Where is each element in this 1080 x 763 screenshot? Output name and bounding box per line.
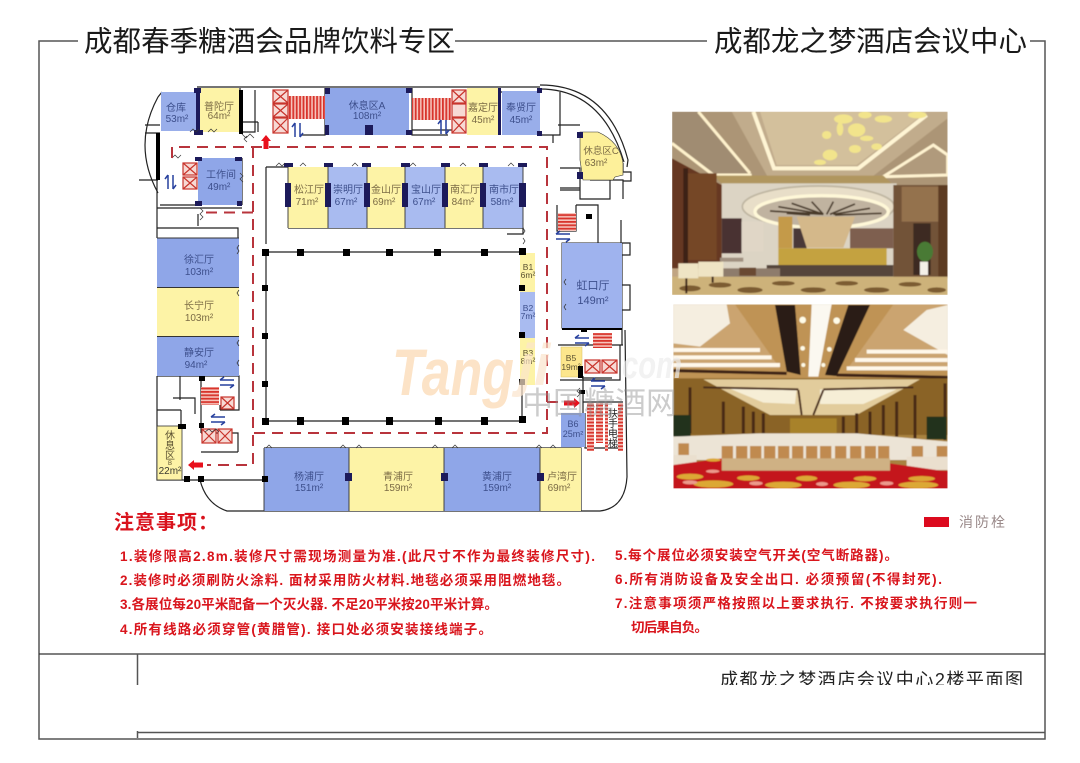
photo: hotel lobby — [672, 112, 948, 295]
room: 金山厅: 金山厅 — [371, 183, 401, 196]
room: 嘉定厅: 嘉定厅 — [468, 101, 498, 114]
booth: B3: 8m² — [521, 356, 535, 366]
note 6: 6.所有消防设备及安全出口. 必须预留(不得封死). — [615, 571, 942, 587]
watermark — [392, 333, 682, 421]
room: 黄浦厅: 159m² — [483, 483, 512, 494]
room: 宝山厅 — [405, 167, 445, 228]
note 7 continued: 切后果自负。 — [631, 619, 708, 635]
room: 崇明厅 — [328, 167, 367, 228]
room: 仓库 — [161, 92, 198, 131]
icons: blue exit arrows — [165, 120, 605, 425]
room: 休息区B: 息 — [165, 439, 175, 452]
room: 休息区C: 63m² — [585, 158, 608, 169]
room: 奉贤厅 — [502, 91, 540, 135]
room: 仓库: 53m² — [166, 114, 189, 125]
room: 静安厅 — [157, 337, 239, 376]
room: 徐汇厅: 徐汇厅 — [184, 253, 214, 266]
room: 宝山厅: 67m² — [413, 197, 436, 208]
room: 南市厅 — [483, 167, 523, 228]
icon: escalator: 梯 — [608, 437, 618, 450]
room: 普陀厅 — [198, 88, 239, 132]
note 5: 5.每个展位必须安装空气开关(空气断路器)。 — [615, 547, 898, 563]
floor plan — [139, 85, 631, 511]
room: 奉贤厅: 奉贤厅 — [506, 101, 536, 114]
room: 工作间: 49m² — [208, 182, 231, 193]
room: 南汇厅 — [445, 167, 483, 228]
room: 松江厅: 71m² — [296, 197, 319, 208]
room: 崇明厅: 崇明厅 — [333, 184, 363, 196]
room: 青浦厅 — [349, 448, 444, 511]
watermark: ji — [511, 333, 552, 398]
room: 休息区C: 休息区C — [583, 145, 619, 157]
room: 松江厅: 松江厅 — [294, 183, 324, 196]
booth: B5: 19m² — [561, 362, 581, 372]
title: hotel name: 成都龙之梦酒店会议中心 — [714, 26, 1027, 58]
room: 长宁厅 — [157, 288, 239, 336]
elevators — [183, 90, 617, 443]
icon: red exit arrow right — [564, 398, 580, 408]
room: 青浦厅: 青浦厅 — [383, 470, 413, 483]
room: 休息区B: 22m² — [159, 466, 182, 477]
room: 徐汇厅 — [157, 238, 239, 287]
room: 长宁厅: 103m² — [185, 313, 214, 324]
room: 休息区C — [580, 132, 623, 180]
room: 休息区B: 休 — [165, 430, 175, 442]
room: 杨浦厅: 杨浦厅 — [294, 470, 324, 483]
booth: B2: 7m² — [521, 311, 535, 321]
room: 南市厅: 58m² — [491, 197, 514, 208]
room: 黄浦厅: 黄浦厅 — [482, 470, 512, 483]
room dividers — [157, 167, 540, 511]
room: 杨浦厅: 151m² — [295, 483, 324, 494]
room: 工作间: 工作间 — [206, 168, 236, 181]
note 3: 3.各展位每20平米配备一个灭火器. 不足20平米按20平米计算。 — [120, 596, 498, 612]
room: 休息区B: B — [168, 461, 172, 467]
note 1: 1.装修限高2.8m.装修尺寸需现场测量为准.(此尺寸不作为最终装修尺寸). — [120, 548, 595, 564]
floor plan caption: 成都龙之梦酒店会议中心2楼平面图 — [720, 670, 1023, 690]
icon: red exit arrow left — [188, 460, 203, 470]
booth: B2 — [520, 292, 535, 338]
booth: B5 — [561, 347, 582, 377]
room: 休息区B — [157, 426, 182, 480]
door symbols — [172, 129, 580, 448]
icon: red exit arrow up — [261, 135, 271, 149]
room: 休息区A: 108m² — [353, 111, 382, 122]
watermark: Tang — [392, 335, 514, 409]
room: 普陀厅: 普陀厅 — [204, 100, 234, 113]
booth: B3 — [520, 338, 535, 385]
legend: fire hydrant: 消防栓 — [959, 514, 1005, 530]
room: 青浦厅: 159m² — [384, 483, 413, 494]
columns — [156, 90, 622, 482]
room: 崇明厅: 67m² — [335, 197, 358, 208]
booth: B2: B2 — [523, 303, 533, 313]
fire route dashed line — [172, 147, 560, 465]
title: expo zone: 成都春季糖酒会品牌饮料专区 — [84, 26, 455, 58]
notes column 1 — [120, 548, 595, 637]
room: 徐汇厅: 103m² — [185, 267, 214, 278]
room: 虹口厅: 149m² — [577, 295, 609, 307]
room: 金山厅: 69m² — [373, 197, 396, 208]
room: 南汇厅: 84m² — [452, 197, 475, 208]
icon: escalator: 电 — [608, 427, 618, 440]
room: 黄浦厅 — [444, 448, 540, 511]
room: 卢湾厅: 卢湾厅 — [547, 470, 577, 483]
room: 金山厅 — [367, 167, 405, 228]
wall pillars navy — [194, 88, 583, 481]
room: 静安厅: 94m² — [185, 360, 208, 371]
room: 奉贤厅: 45m² — [510, 115, 533, 126]
note 4: 4.所有线路必须穿管(黄腊管). 接口处必须安装接线端子。 — [120, 621, 492, 637]
room: 休息区A: 休息区A — [349, 99, 386, 112]
room: 普陀厅: 64m² — [208, 111, 231, 122]
booth: B6 — [561, 413, 585, 447]
note 2: 2.装修时必须刷防火涂料. 面材采用防火材料.地毯必须采用阻燃地毯。 — [120, 572, 570, 588]
room: 虹口厅: 虹口厅 — [576, 279, 610, 292]
building walls — [139, 85, 631, 511]
room: 卢湾厅 — [540, 448, 581, 511]
legend: fire hydrant — [924, 514, 1005, 530]
notes column 2 — [615, 547, 978, 635]
room: 嘉定厅: 45m² — [472, 115, 495, 126]
stairs — [201, 96, 612, 405]
room: 静安厅: 静安厅 — [184, 346, 214, 359]
booth: B1: B1 — [523, 262, 533, 272]
booth: B1 — [520, 253, 535, 292]
note 7: 7.注意事项须严格按照以上要求执行. 不按要求执行则一 — [615, 595, 978, 611]
room: 松江厅 — [288, 167, 328, 228]
icon: escalator — [587, 403, 623, 451]
room: 宝山厅: 宝山厅 — [411, 183, 441, 196]
booth: B6: B6 — [567, 419, 579, 429]
room: 杨浦厅 — [264, 448, 349, 511]
notes heading: 注意事项 — [114, 510, 198, 534]
room: 休息区A — [325, 88, 409, 135]
watermark: 中国糖酒网 — [522, 386, 677, 421]
room: 仓库: 仓库 — [166, 101, 186, 114]
room: 嘉定厅 — [467, 88, 498, 135]
notes heading: ： — [198, 512, 219, 534]
room: 虹口厅 — [562, 243, 622, 328]
room: 工作间 — [198, 158, 242, 205]
booth: B1: 6m² — [521, 270, 535, 280]
booth: B6: 25m² — [563, 429, 583, 439]
room: 卢湾厅: 69m² — [548, 483, 571, 494]
room: 南汇厅: 南汇厅 — [450, 183, 480, 196]
photo: banquet hall — [673, 304, 948, 489]
room: 休息区B: 区 — [165, 450, 175, 462]
room: 南市厅: 南市厅 — [489, 183, 519, 196]
icon: escalator: 扶 — [608, 407, 618, 420]
booth: B5: B5 — [566, 353, 576, 363]
icon: escalator: 手 — [608, 417, 618, 430]
watermark: com — [622, 345, 682, 387]
room: 长宁厅: 长宁厅 — [184, 299, 214, 312]
booth: B3: B3 — [523, 348, 533, 358]
